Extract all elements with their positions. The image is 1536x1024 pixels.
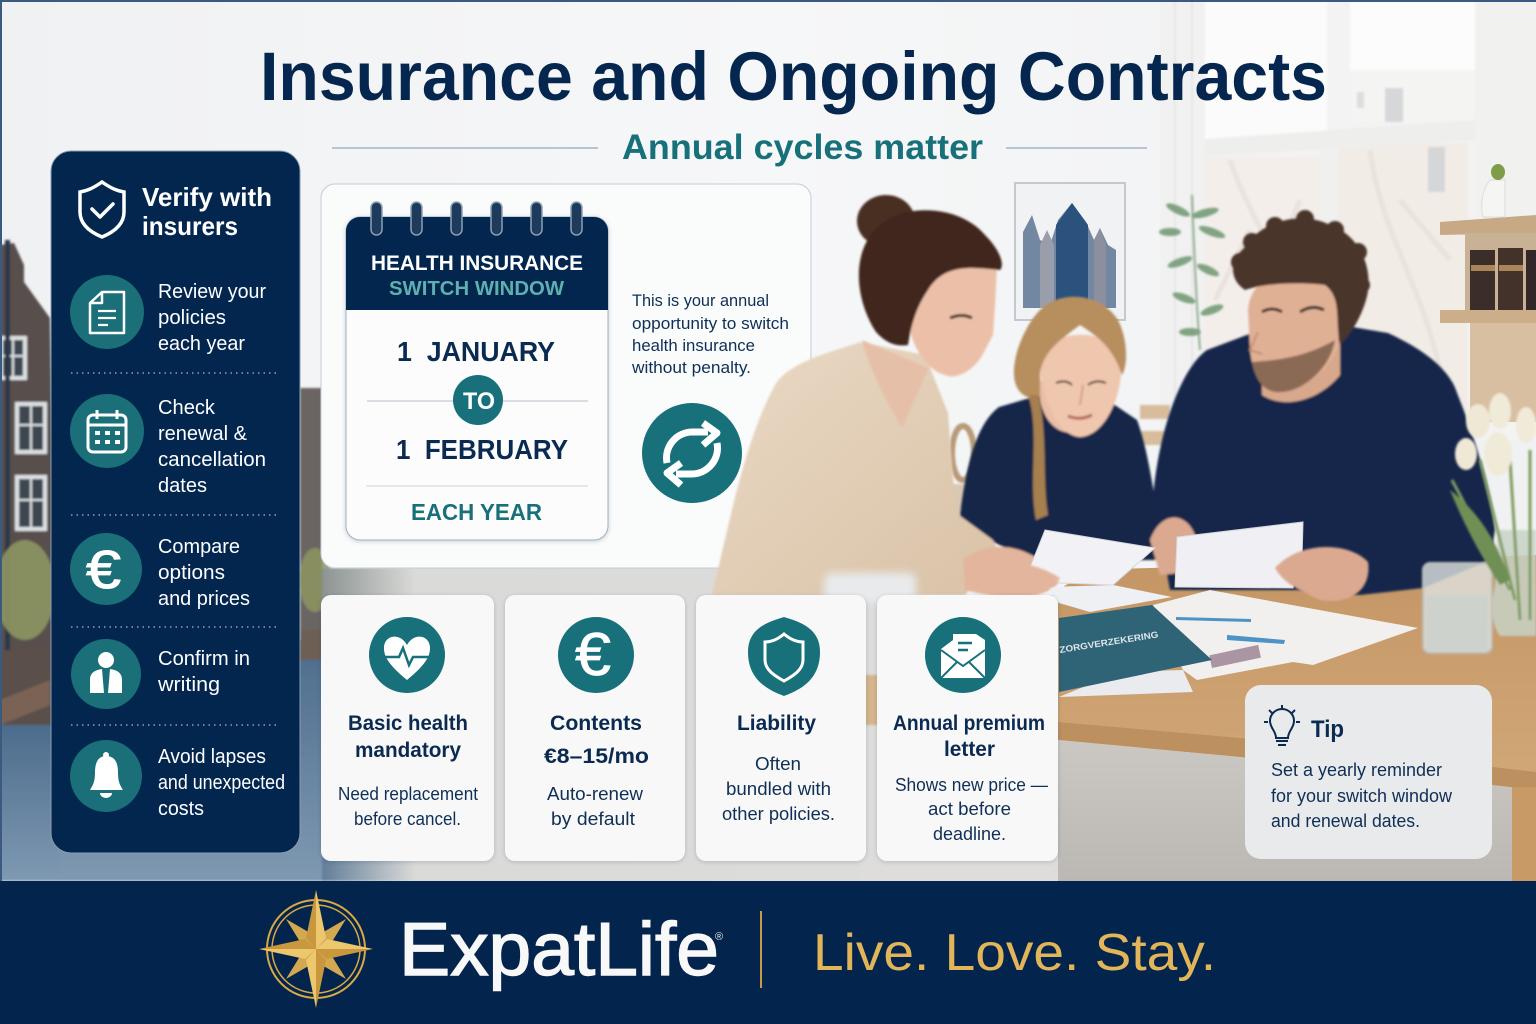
bookshelf: [1440, 164, 1536, 422]
logo: compass: [259, 890, 373, 1008]
woman: [712, 195, 1060, 597]
heading: verify with insurers: insurers: [142, 211, 238, 241]
card: liability: other policies.: [722, 804, 835, 824]
card: tip: Set a yearly reminder: [1271, 760, 1442, 780]
footer band: ®: [715, 931, 723, 943]
card: annual premium letter: Annual premium: [893, 712, 1045, 735]
card: tip: and renewal dates.: [1271, 811, 1420, 831]
plant: [1159, 195, 1227, 350]
item: check dates: dates: [158, 475, 207, 497]
item: confirm in writing: [71, 639, 250, 709]
card: annual premium letter: letter: [944, 738, 995, 761]
fade across the scene: [320, 566, 880, 881]
text: switch explanation: opportunity to switch: [632, 314, 789, 333]
item: compare options: Compare: [158, 536, 240, 558]
card: tip: [1245, 685, 1492, 859]
item: avoid lapses: costs: [158, 798, 204, 820]
child: [959, 297, 1165, 560]
item: check dates: [70, 394, 266, 497]
card: basic health: mandatory: [355, 739, 461, 762]
man's document: [1175, 522, 1303, 588]
heading: verify with insurers: [142, 182, 272, 241]
subtitle: Annual cycles matter: [622, 128, 983, 167]
card: contents: Auto-renew: [547, 784, 644, 804]
card: annual premium letter: act before: [928, 799, 1011, 819]
calendar: HEALTH INSURANCE: [371, 252, 583, 275]
kitchen items: [948, 426, 974, 544]
item: check dates: cancellation: [158, 449, 266, 471]
card: liability: [696, 595, 866, 861]
table: [1058, 555, 1536, 881]
panel: health insurance switch window: [321, 184, 811, 568]
card: annual premium letter: deadline.: [933, 824, 1006, 844]
card: tip: for your switch window: [1271, 786, 1453, 806]
man's hand: [1275, 547, 1368, 601]
calendar: EACH YEAR: [411, 499, 542, 525]
item: check dates: Check: [158, 397, 216, 419]
wall poster: [1015, 183, 1125, 320]
card: tip: Tip: [1311, 716, 1344, 743]
panel: verify with insurers: [51, 151, 300, 853]
photo: family reviewing documents: [712, 195, 1495, 603]
item: check dates: renewal &: [158, 423, 248, 445]
heading: verify with insurers: Verify with: [142, 182, 272, 212]
folder: ZORGVERZEKERING: [1059, 629, 1159, 655]
logo: wordmark: ExpatLife: [399, 907, 719, 991]
item: avoid lapses: and unexpected: [158, 772, 285, 794]
item: avoid lapses: Avoid lapses: [158, 746, 266, 768]
item: review policies: each year: [158, 333, 245, 355]
item: compare options: €: [86, 540, 121, 600]
text: switch explanation: [631, 291, 789, 377]
icon: envelope letter: [925, 617, 1001, 693]
icon: lightbulb: [1264, 705, 1300, 745]
icon: shield check: [80, 182, 124, 237]
footer band: [0, 881, 1536, 1024]
glass and tulips: [1423, 393, 1536, 653]
card: liability: bundled with: [726, 779, 831, 799]
woman's hand: [995, 563, 1060, 596]
text: switch explanation: This is your annual: [632, 291, 769, 310]
icon: euro: €: [575, 621, 611, 688]
card: annual premium letter: Shows new price —: [895, 775, 1048, 795]
calendar: [346, 202, 608, 540]
card: annual premium letter: [877, 595, 1058, 861]
floor behind cards: [860, 595, 1060, 881]
item: review policies: [70, 275, 266, 355]
item: confirm in writing: Confirm in: [158, 648, 250, 670]
icon: euro: [558, 617, 634, 693]
item: review policies: Review your: [158, 281, 266, 303]
card: basic health: Basic health: [348, 712, 468, 735]
card: contents: €8–15/mo: [544, 745, 649, 768]
card: contents: [505, 595, 685, 861]
icon: heart pulse: [369, 617, 445, 693]
card: basic health: [321, 595, 494, 861]
card: basic health: Need replacement: [338, 784, 478, 804]
card: liability: Liability: [737, 712, 816, 735]
calendar: TO: [463, 388, 495, 415]
card: contents: by default: [551, 809, 635, 829]
item: avoid lapses: [70, 740, 285, 820]
item: compare options: and prices: [158, 588, 250, 610]
item: confirm in writing: writing: [157, 674, 220, 696]
calendar: 1 JANUARY: [397, 336, 555, 367]
man: [1150, 210, 1495, 595]
candle: [824, 573, 916, 603]
card: basic health: before cancel.: [354, 809, 461, 829]
card: liability: Often: [755, 754, 801, 774]
item: compare options: [70, 533, 250, 610]
table papers and folder: [995, 393, 1536, 697]
calendar: SWITCH WINDOW: [389, 278, 564, 300]
card: contents: Contents: [550, 712, 642, 735]
woman's document: [1027, 530, 1155, 585]
item: compare options: options: [158, 562, 225, 584]
text: switch explanation: health insurance: [632, 336, 755, 355]
tagline: Live. Love. Stay.: [813, 924, 1216, 982]
text: switch explanation: without penalty.: [631, 358, 751, 377]
icon: shield: [748, 617, 820, 696]
icon: switch arrows: [642, 403, 742, 503]
item: review policies: policies: [158, 307, 226, 329]
calendar: 1 FEBRUARY: [396, 434, 568, 465]
title: Insurance and Ongoing Contracts: [260, 38, 1327, 115]
folder: [1059, 605, 1212, 692]
window: [1140, 0, 1536, 445]
scene: canal houses: [0, 240, 422, 881]
